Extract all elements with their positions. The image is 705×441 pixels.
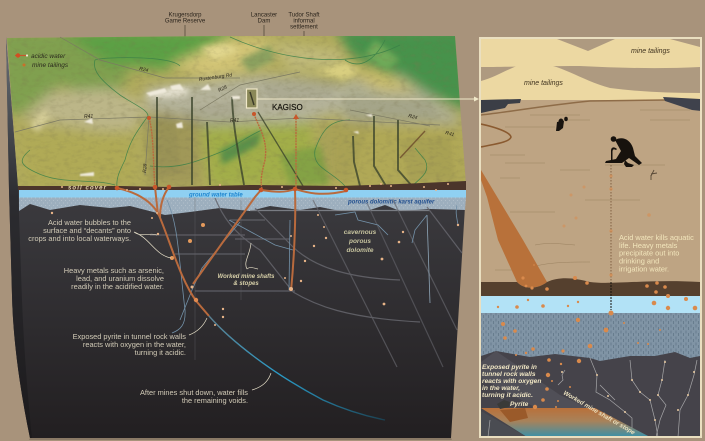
callout: pyrite: reacts with oxygen in the water,: [83, 340, 186, 349]
upper river bend: [481, 124, 511, 147]
label: cavernous porous dolomite: porous: [348, 238, 371, 245]
label: worked mine shafts and stopes: Worked mine shafts: [218, 274, 275, 280]
small dots on fractures: [561, 361, 695, 421]
callout: water fills voids: the remaining voids.: [182, 396, 248, 405]
label: aquifer: porous dolomitic karst aquifer: [347, 200, 435, 206]
label: Tudor Shaft informal settlement: informal: [293, 18, 315, 24]
ground water table: [19, 190, 466, 198]
back mine tailings: [481, 39, 700, 68]
person collecting water: [605, 136, 642, 167]
label: ground water table: ground water table: [188, 192, 243, 198]
rivers: [22, 37, 427, 187]
callout: decants: Acid water bubbles to the: [48, 218, 131, 227]
mine tailings labels: mine tailings: [631, 48, 670, 55]
water seepage lines: [167, 200, 458, 333]
legend: mine tailings: mine tailings: [32, 62, 69, 69]
legend: [15, 53, 69, 69]
inset text: worked mine shaft or stope: Worked mine shaft or stope: [562, 390, 636, 437]
callout: decants: [28, 218, 171, 258]
hatched aquifer layer: [481, 313, 700, 363]
dark shaft lines on terrain: [157, 97, 425, 187]
mine tailings labels: mine tailings: [524, 80, 563, 87]
tailings taupe background: [481, 39, 700, 93]
label: cavernous porous dolomite: dolomite: [346, 247, 374, 254]
label: worked mine shafts and stopes: & stopes: [233, 281, 259, 287]
callout: water fills voids: [140, 373, 271, 405]
acid water flow paths: [117, 114, 346, 316]
road labels: R28: [142, 163, 149, 173]
callout: pyrite: Exposed pyrite in tunnel rock walls: [73, 332, 186, 341]
callout: heavy metals: [64, 266, 164, 291]
side tunnel: [481, 412, 524, 436]
inset text: exposed pyrite: reacts with oxygen: [482, 378, 541, 385]
pyrite crust: [500, 408, 528, 422]
ground surface: [520, 100, 665, 101]
dotted seepage line: [610, 165, 612, 280]
village left: [481, 99, 521, 113]
road: [481, 100, 665, 115]
label: soil cover: soil cover: [68, 186, 107, 192]
road labels: Rustenburg Rd: [198, 72, 233, 83]
label: Tudor Shaft informal settlement: settlement: [290, 24, 318, 30]
label: KAGISO: KAGISO: [272, 103, 303, 112]
pyrite: [497, 400, 510, 409]
callout: pyrite: turning it acidic.: [135, 348, 186, 357]
roads: [15, 37, 440, 175]
legend: acidic water: acidic water: [31, 53, 66, 60]
road labels: R24: [139, 66, 149, 74]
label: Lancaster Dam: Lancaster: [251, 12, 277, 18]
road labels: R41: [444, 130, 455, 138]
inset text: acid water kills aquatic life: Acid water kills aquatic: [619, 233, 694, 242]
inset text: exposed pyrite: in the water,: [482, 385, 520, 392]
inset text: acid water kills aquatic life: [619, 233, 694, 274]
soil cover layer: [18, 181, 466, 192]
callout: heavy metals: Heavy metals such as arsenic,: [64, 266, 164, 275]
label: worked mine shafts and stopes: [218, 243, 275, 287]
label: cavernous porous dolomite: cavernous: [344, 229, 377, 236]
label: Krugersdorp Game Reserve: [165, 12, 206, 68]
label: Krugersdorp Game Reserve: Game Reserve: [165, 18, 206, 24]
label: Krugersdorp Game Reserve: Krugersdorp: [168, 12, 202, 18]
label: cavernous porous dolomite: [344, 229, 377, 254]
inset locator box and arrow: [246, 89, 479, 108]
ground cracks: [490, 110, 690, 270]
road labels: R24: [407, 113, 418, 121]
label: Tudor Shaft informal settlement: Tudor Shaft: [288, 12, 320, 18]
callout: decants: surface and “decants” onto: [43, 226, 131, 235]
tailing dots: [51, 112, 459, 326]
callout: water fills voids: After mines shut down, water fills: [140, 388, 248, 397]
underground block: [6, 37, 466, 440]
rock: [481, 351, 700, 437]
inset panel: [480, 38, 701, 437]
droplets: [497, 174, 697, 409]
callouts: [28, 218, 271, 405]
inset text: exposed pyrite: Pyrite: [510, 401, 529, 408]
inset text: exposed pyrite: tunnel rock walls: [482, 371, 536, 378]
small plant: [651, 170, 657, 180]
inset text: acid water kills aquatic life: irrigation water.: [619, 264, 669, 274]
label: Lancaster Dam: Dam: [258, 18, 270, 24]
callout: decants: crops and into local waterways.: [28, 234, 131, 243]
porous dolomitic karst aquifer: [19, 198, 466, 215]
acid river: [481, 170, 547, 288]
road labels: R41: [84, 114, 93, 120]
white tailings on terrain: [80, 84, 372, 176]
label: Lancaster Dam: [251, 12, 277, 90]
road labels: [84, 66, 455, 173]
inset text: exposed pyrite: turning it acidic.: [482, 392, 533, 399]
village right: [663, 97, 701, 111]
road labels: R41: [230, 118, 239, 124]
figures in distance: [556, 117, 568, 131]
front mine tailings: [481, 66, 700, 100]
mine tailings labels: [524, 48, 670, 87]
inset text: exposed pyrite: Exposed pyrite in: [482, 364, 537, 371]
blue water-fill curve: [209, 316, 385, 420]
inset text: acid water kills aquatic life: life. Heavy metals: [619, 241, 678, 250]
worked mine shafts: [150, 197, 462, 367]
rock fractures: [488, 358, 697, 437]
inset text: exposed pyrite: [482, 364, 541, 408]
label: Tudor Shaft informal settlement: [288, 12, 320, 62]
water layer: [481, 296, 700, 313]
road labels: R28: [217, 84, 228, 94]
inset text: acid water kills aquatic life: precipitate out into: [619, 248, 679, 258]
inset text: acid water kills aquatic life: drinking and: [619, 256, 659, 266]
terrain map: [7, 36, 466, 187]
soil layer: [481, 278, 700, 296]
callout: pyrite: [73, 318, 207, 357]
stope: [481, 408, 650, 437]
callout: heavy metals: readily in the acidified water.: [71, 282, 164, 291]
callout: heavy metals: lead, and uranium dissolve: [76, 274, 164, 283]
shaft band: [481, 352, 587, 408]
